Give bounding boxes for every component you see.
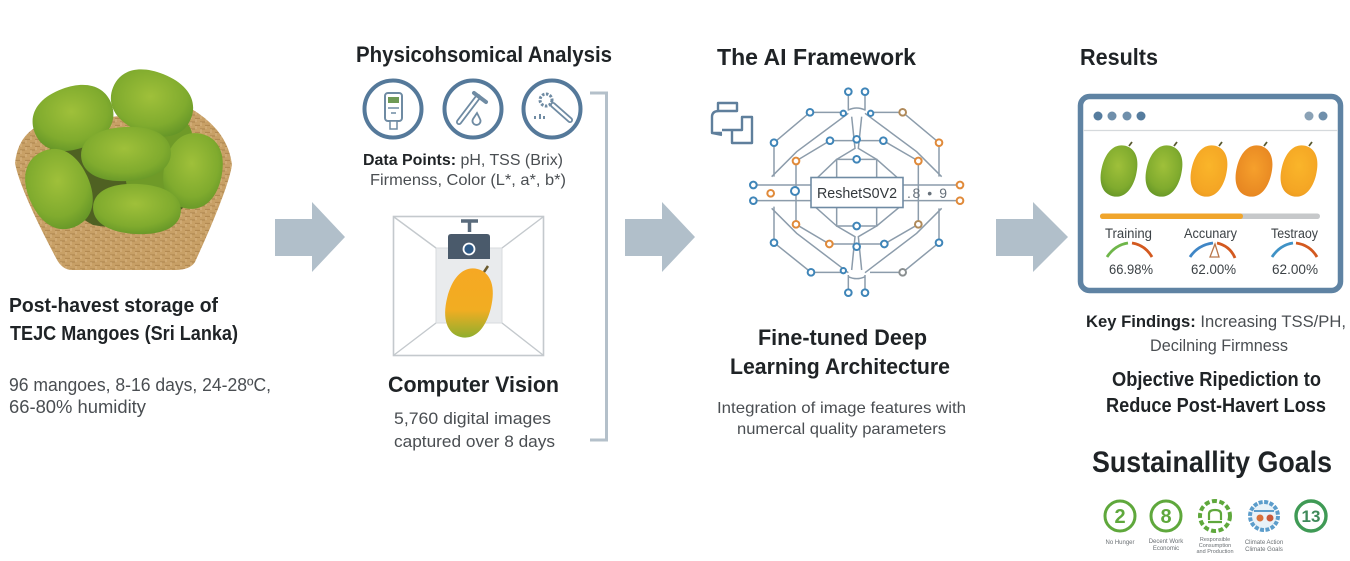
icon: UN emblem: Climate Goals	[1245, 547, 1283, 553]
icon: basket of mangoes	[15, 69, 232, 270]
arrow: storage to analysis	[275, 202, 345, 272]
panel: physicochemical analysis	[356, 42, 612, 451]
heading: reduce loss: Reduce Post-Havert Loss	[1106, 395, 1326, 417]
heading: storage: Post-havest storage of	[9, 295, 218, 317]
text: storage conditions: 96 mangoes, 8-16 days, 24-28ºC,	[9, 375, 271, 395]
text: image count: 5,760 digital images	[394, 410, 551, 428]
icon: SDG 8: Decent Work	[1149, 539, 1184, 545]
metric: accuracy: 62.00%	[1191, 261, 1236, 277]
metric: test: Testraoy	[1271, 226, 1318, 241]
icon: SDG 12: Responsible	[1200, 537, 1230, 543]
text: integration: Integration of image features with	[717, 400, 966, 417]
heading: fine-tuned: Fine-tuned Deep	[758, 325, 927, 350]
text: firmness and color: Firmenss, Color (L*, a*, b*)	[370, 172, 566, 189]
metric: accuracy: Accunary	[1184, 226, 1237, 241]
metric: accuracy	[1184, 226, 1237, 277]
metric: training: 66.98%	[1109, 261, 1153, 277]
icon: SDG 2: 2	[1114, 506, 1126, 528]
metric: training	[1105, 226, 1153, 277]
text: parameters: numercal quality parameters	[737, 421, 946, 438]
icon: SDG 2	[1105, 501, 1135, 546]
heading: framework: The AI Framework	[717, 44, 916, 70]
icon: SDG 13: 13	[1302, 507, 1320, 526]
icon: SDG 12: Consumption	[1199, 543, 1231, 549]
panel: results	[1080, 44, 1346, 555]
heading: analysis: Physicohsomical Analysis	[356, 42, 612, 67]
icon: SDG 12	[1196, 501, 1234, 555]
text: data points: Data Points: pH, TSS (Brix)	[363, 152, 563, 169]
heading: architecture: Learning Architecture	[730, 354, 950, 379]
text: network side value: .8 • 9	[907, 185, 947, 201]
text: key findings: Key Findings: Increasing TSS/PH,	[1086, 312, 1346, 331]
metric: training: Training	[1105, 226, 1152, 241]
icon: SDG 8: 8	[1160, 506, 1172, 528]
illustration: imaging chamber	[394, 216, 544, 356]
metric: test	[1271, 226, 1318, 277]
arrow: analysis to framework	[625, 202, 695, 272]
icon: SDG 2: No Hunger	[1105, 540, 1135, 546]
icon: pH meter	[364, 80, 422, 138]
panel: AI framework	[712, 44, 966, 438]
icon: SDG 13	[1296, 501, 1326, 531]
dashboard window	[1080, 96, 1340, 290]
icon: workflow	[712, 103, 752, 143]
arrow: framework to results	[996, 202, 1068, 272]
heading: objective: Objective Ripediction to	[1112, 369, 1321, 391]
panel: post-harvest storage	[9, 69, 271, 417]
heading: results: Results	[1080, 44, 1158, 70]
text: firmness finding: Decilning Firmness	[1150, 336, 1288, 355]
text: humidity: 66-80% humidity	[9, 397, 146, 417]
heading: computer vision: Computer Vision	[388, 372, 559, 397]
progress bar	[1100, 214, 1320, 219]
icon: refractometer	[444, 80, 502, 138]
icon: UN emblem: Climate Action	[1245, 540, 1283, 546]
ripening mango sequence	[1101, 142, 1317, 197]
text: capture period: captured over 8 days	[394, 433, 555, 451]
icon: SDG 8: Economic	[1153, 546, 1179, 552]
icon: SDG 8	[1149, 501, 1184, 552]
icon: firmness tester	[524, 80, 580, 138]
metric: test: 62.00%	[1272, 261, 1318, 277]
icon: SDG 12: and Production	[1196, 549, 1234, 555]
window dots	[1094, 112, 1328, 120]
box: model name: ReshetS0V2	[817, 185, 897, 202]
bracket	[590, 93, 606, 440]
diagram: neural network	[750, 88, 963, 296]
box: model name	[811, 178, 903, 208]
icon: UN emblem	[1245, 502, 1283, 553]
heading: mango variety: TEJC Mangoes (Sri Lanka)	[10, 323, 238, 345]
